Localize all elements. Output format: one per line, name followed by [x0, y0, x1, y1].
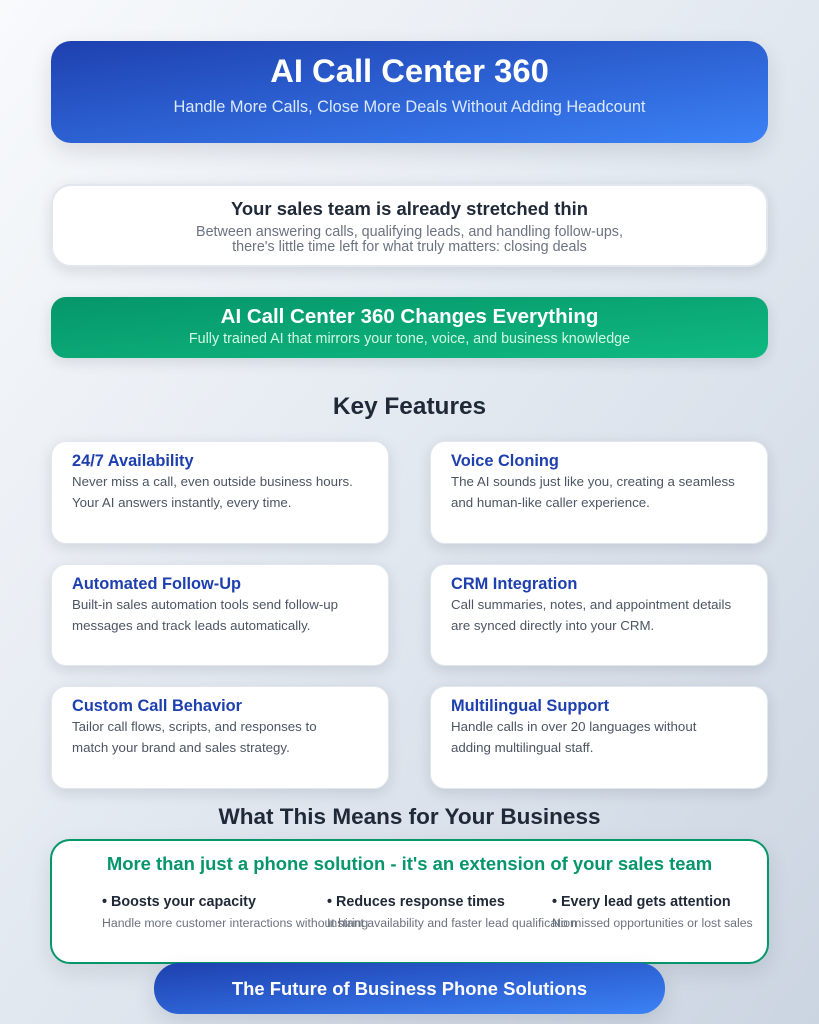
panel: benefits	[50, 839, 769, 964]
feature card: automated follow-up	[51, 564, 389, 666]
feature card: CRM integration: CRM Integration	[451, 574, 577, 592]
benefit: capacity	[102, 894, 368, 930]
feature card: voice cloning: Voice Cloning	[451, 452, 559, 470]
problem heading: Your sales team is already stretched thin	[231, 198, 588, 219]
feature card: custom call behavior: Tailor call flows, scripts, and responses to	[72, 719, 317, 734]
solution text: Fully trained AI that mirrors your tone, voice, and business knowledge	[189, 331, 630, 347]
feature card: custom call behavior: Custom Call Behavior	[72, 697, 242, 715]
feature card: 24/7 availability: 24/7 Availability	[72, 452, 194, 470]
feature card: 24/7 availability	[51, 441, 389, 544]
feature card: voice cloning	[430, 441, 768, 544]
heading: key features: Key Features	[333, 393, 486, 420]
feature card: automated follow-up: messages and track leads automatically.	[72, 618, 310, 632]
feature card: voice cloning: and human-like caller experience.	[451, 495, 650, 510]
solution heading: AI Call Center 360 Changes Everything	[221, 305, 598, 328]
feature card: custom call behavior	[51, 686, 389, 788]
panel: solution banner	[51, 297, 768, 358]
feature card: multilingual support: Handle calls in over 20 languages without	[451, 719, 696, 734]
benefit: lead attention: • Every lead gets attention	[552, 894, 731, 910]
feature card: CRM integration: are synced directly into your CRM.	[451, 618, 654, 632]
feature card: voice cloning: The AI sounds just like you, creating a seamless	[451, 474, 735, 489]
benefit: response times: Instant availability and faster lead qualification	[327, 916, 577, 930]
feature card: CRM integration: Call summaries, notes, and appointment details	[451, 596, 731, 612]
feature card: multilingual support: adding multilingual staff.	[451, 740, 593, 755]
header banner	[51, 41, 768, 143]
benefit: response times: • Reduces response times	[327, 894, 505, 910]
problem text	[196, 224, 623, 255]
benefit: response times	[327, 894, 577, 930]
feature card: 24/7 availability: Never miss a call, even outside business hours.	[72, 474, 353, 489]
feature card: automated follow-up: Automated Follow-Up	[72, 574, 241, 592]
closing text: The Future of Business Phone Solutions	[232, 978, 587, 999]
feature card: multilingual support: Multilingual Support	[451, 697, 609, 715]
heading: business meaning: What This Means for Your Business	[218, 804, 600, 829]
benefits heading: More than just a phone solution - it's an extension of your sales team	[107, 853, 712, 874]
benefit: capacity: Handle more customer interactions without hiring	[102, 916, 368, 930]
problem text: Between answering calls, qualifying leads, and handling follow-ups,	[196, 224, 623, 240]
feature card: CRM integration	[430, 564, 768, 666]
problem text: there's little time left for what truly matters: closing deals	[232, 239, 587, 255]
panel: problem statement	[51, 184, 768, 267]
subtitle: Handle More Calls, Close More Deals Without Adding Headcount	[174, 98, 645, 116]
benefit: capacity: • Boosts your capacity	[102, 894, 256, 910]
title: AI Call Center 360	[270, 52, 549, 89]
benefit: lead attention	[552, 894, 753, 930]
closing banner	[154, 963, 665, 1014]
feature card: multilingual support	[430, 686, 768, 788]
feature card: custom call behavior: match your brand and sales strategy.	[72, 740, 290, 755]
benefit: lead attention: No missed opportunities or lost sales	[552, 916, 753, 930]
feature card: 24/7 availability: Your AI answers instantly, every time.	[72, 495, 292, 510]
feature card: automated follow-up: Built-in sales automation tools send follow-up	[72, 596, 338, 612]
